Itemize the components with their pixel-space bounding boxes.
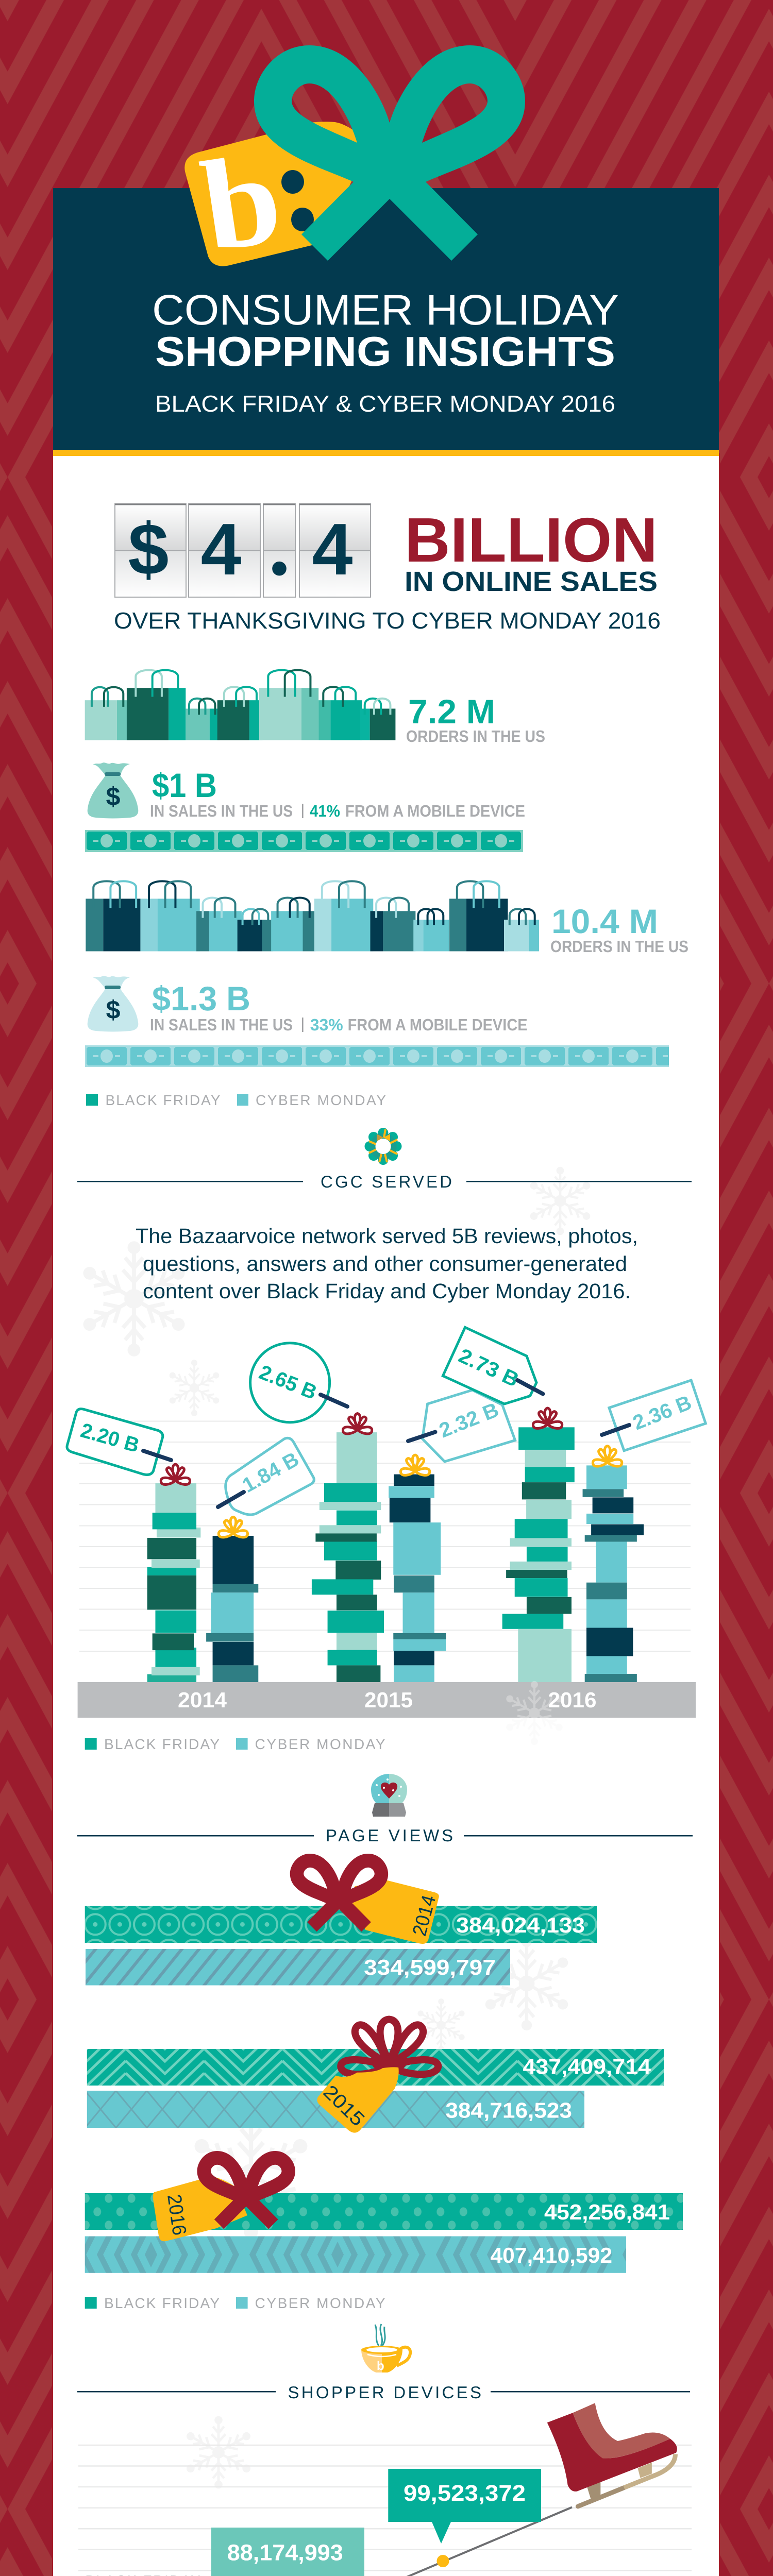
icon: 2015 tag and bow (317, 2019, 438, 2133)
series: black friday (86, 2403, 677, 2576)
legend 3 (85, 2295, 385, 2311)
icon: money bag teal: $ (106, 782, 121, 811)
point: 2016 (437, 2555, 486, 2576)
stat: $1.3 B sales: $1.3 B (152, 979, 250, 1018)
tag: 2.20 B: 2.20 B (78, 1419, 142, 1457)
title: CONSUMER HOLIDAY (152, 286, 619, 334)
stat: $1 B sales: FROM A MOBILE DEVICE (345, 802, 525, 820)
value: 334,599,797: 334,599,797 (364, 1955, 496, 1979)
icon: money bag blue (88, 976, 138, 1031)
column: 2014 cyber monday (206, 1536, 258, 1682)
icon: 2016 tag and bow (153, 2151, 295, 2241)
callout: 88,174,993: 88,174,993 (227, 2540, 343, 2566)
panel: white page (52, 453, 720, 2576)
bill strip: cyber monday (85, 1045, 669, 1067)
legend 1 (86, 1092, 386, 1108)
text block: CGC intro: questions, answers and other consumer-generated (143, 1252, 627, 1276)
column: 2016 cyber monday (583, 1465, 644, 1682)
flip counter: $4.4 (115, 497, 371, 597)
bar chart: page views 2014 (85, 1854, 597, 1986)
flip counter: $4.4: 4 (312, 509, 353, 590)
bar: 2014 black friday (85, 1906, 597, 1943)
tag: 2.36 B: 2.36 B (630, 1391, 695, 1434)
stat: 10.4 M orders: ORDERS IN THE US (550, 937, 688, 956)
tag: 2.73 B (443, 1327, 543, 1404)
text block: CGC intro: The Bazaarvoice network served 5B reviews, photos, (136, 1224, 638, 1248)
bar chart: page views 2016 (85, 2151, 683, 2273)
bar: 2014 cyber monday (86, 1949, 510, 1986)
heading: CGC served: CGC SERVED (321, 1172, 452, 1191)
title (152, 286, 619, 375)
tag: 1.84 B: 1.84 B (239, 1448, 303, 1497)
value: 452,256,841: 452,256,841 (544, 2200, 670, 2224)
text block: CGC intro (136, 1224, 638, 1303)
snowflakes background (80, 1168, 592, 2576)
tag: 2.36 B (602, 1380, 705, 1451)
icon: money bag teal (88, 762, 138, 818)
tag: 2.32 B: 2.32 B (436, 1398, 502, 1442)
icon: 2014 tag and bow (290, 1854, 440, 1944)
bill strip: black friday (85, 830, 523, 852)
legend 1: CYBER MONDAY (256, 1092, 386, 1108)
stat: 10.4 M orders (550, 902, 688, 956)
icon: snow globe (371, 1774, 407, 1817)
tag: 2.65 B (250, 1343, 347, 1422)
header panel (53, 45, 719, 456)
column: 2014 black friday (147, 1483, 200, 1682)
flip counter: $4.4: . (268, 497, 290, 594)
stat: $1.3 B sales: IN SALES IN THE US (150, 1015, 293, 1034)
chart: shopper devices (78, 2403, 702, 2576)
chart: CGC served stacked gifts (67, 1327, 705, 1744)
subtitle: BLACK FRIDAY & CYBER MONDAY 2016 (155, 391, 615, 417)
column: 2015 cyber monday (389, 1475, 446, 1682)
value: 407,410,592: 407,410,592 (491, 2243, 612, 2267)
icon: wreath (365, 1128, 402, 1165)
icon: yellow b: tag (184, 122, 363, 279)
legend 2 (85, 1736, 385, 1752)
column: 2015 black friday (312, 1432, 384, 1682)
grid lines (78, 2445, 692, 2576)
callout: 99,523,372: 99,523,372 (404, 2481, 526, 2506)
text block: CGC intro: content over Black Friday and Cyber Monday 2016. (143, 1279, 631, 1303)
legend 2: BLACK FRIDAY (104, 1736, 220, 1752)
value: 384,024,133: 384,024,133 (456, 1913, 585, 1937)
stat: $1 B sales: $1 B (152, 766, 217, 804)
stat: 7.2 M orders: 7.2 M (408, 692, 495, 731)
tag: 2.65 B: 2.65 B (256, 1361, 320, 1404)
column: 2016 black friday (502, 1427, 575, 1682)
bar: 2016 black friday (85, 2193, 683, 2230)
value: 437,409,714: 437,409,714 (523, 2055, 651, 2079)
stat: $1.3 B sales: FROM A MOBILE DEVICE (348, 1015, 528, 1034)
axis bar with years: 2015 (364, 1688, 413, 1712)
stat: $1 B sales (150, 766, 525, 820)
bar: 2015 cyber monday (87, 2091, 584, 2128)
stat: $1.3 B sales: 33% (310, 1015, 343, 1034)
icon: 2016 tag and bow: 2016 (163, 2193, 190, 2236)
heading: shopper devices: SHOPPER DEVICES (288, 2383, 481, 2402)
bar: 2015 black friday (87, 2049, 664, 2086)
heading: billion in online sales: IN ONLINE SALES (405, 566, 658, 597)
icon: 2015 tag and bow: 2015 (319, 2081, 368, 2130)
stat: 7.2 M orders (406, 692, 545, 745)
stat: $1 B sales: IN SALES IN THE US (150, 802, 293, 820)
value: 384,716,523: 384,716,523 (445, 2098, 572, 2123)
legend 3: BLACK FRIDAY (104, 2295, 220, 2311)
tag: 1.84 B (218, 1438, 314, 1515)
legend 1: BLACK FRIDAY (105, 1092, 221, 1108)
stat: 7.2 M orders: ORDERS IN THE US (406, 727, 545, 745)
icons: small gift bows (161, 1408, 622, 1537)
icon: ice skate (547, 2403, 677, 2506)
icon: coffee cup (361, 2324, 410, 2373)
shopping bags: cyber monday (86, 881, 539, 951)
tag: 2.32 B (408, 1390, 515, 1462)
trend line (102, 2507, 572, 2576)
bar chart: page views 2015 (87, 2019, 664, 2133)
grid lines (79, 1421, 691, 1651)
icon: 2014 tag and bow: 2014 (409, 1893, 440, 1938)
shopping bags: black friday (85, 670, 395, 740)
icon: yellow b: tag: b (193, 125, 290, 279)
subheading: OVER THANKSGIVING TO CYBER MONDAY 2016 (114, 607, 661, 634)
legend 2: CYBER MONDAY (255, 1736, 385, 1752)
legend 3: CYBER MONDAY (255, 2295, 385, 2311)
flip counter: $4.4: 4 (201, 509, 242, 590)
icon: coffee cup: b (377, 2359, 384, 2373)
icon: teal ribbon bow (254, 45, 525, 261)
stat: $1 B sales: 41% (310, 802, 340, 820)
heading: billion in online sales: BILLION (405, 505, 658, 575)
heading: page views: PAGE VIEWS (326, 1826, 453, 1845)
tag: 2.73 B: 2.73 B (455, 1344, 522, 1392)
stat: $1.3 B sales (150, 979, 528, 1034)
bar: 2016 cyber monday (85, 2236, 626, 2273)
stat: 10.4 M orders: 10.4 M (551, 902, 658, 940)
axis bar with years (78, 1682, 696, 1744)
callout: 99,523,372 (388, 2469, 541, 2544)
callout: 88,174,993 (211, 2528, 364, 2576)
icon: money bag blue: $ (106, 995, 121, 1024)
title: SHOPPING INSIGHTS (155, 329, 615, 375)
flip counter: $4.4: $ (128, 509, 169, 590)
tag: 2.20 B (67, 1409, 171, 1475)
axis bar with years: 2014 (178, 1688, 227, 1712)
axis bar with years: 2016 (548, 1688, 597, 1712)
